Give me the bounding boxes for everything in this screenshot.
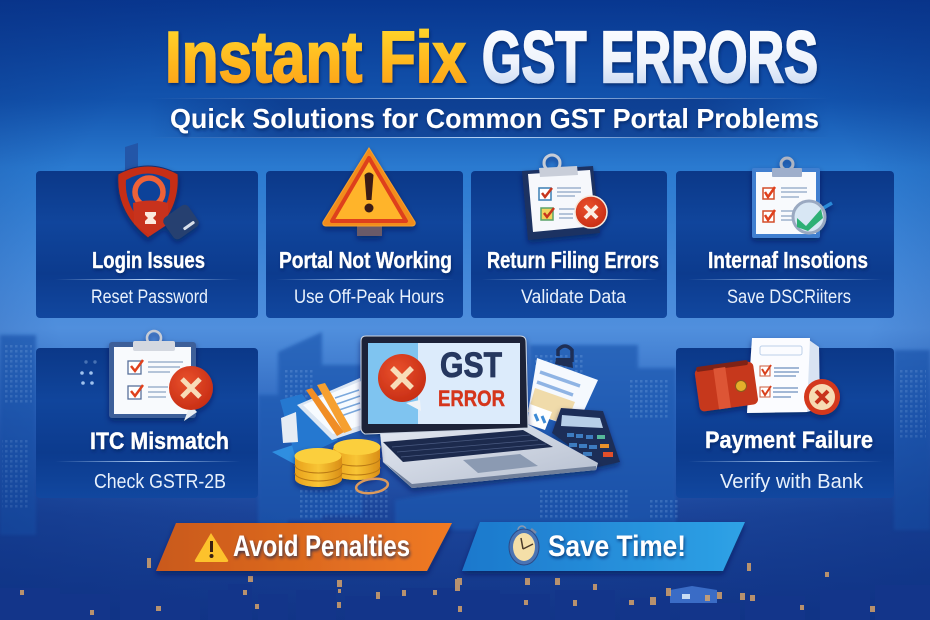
bottom night skyline (0, 558, 930, 620)
banner text: Save Time! (548, 530, 686, 563)
panel: payment failure (676, 348, 894, 498)
dots (80, 360, 97, 385)
decorative dark block behind login icon (125, 143, 138, 172)
icon: clipboard with red x (itc) (109, 331, 213, 421)
lit house (670, 586, 717, 603)
heading: itc mismatch: ITC Mismatch (90, 428, 229, 455)
heading: internaf insotions: Internaf Insotions (708, 247, 868, 273)
touchpad (463, 454, 538, 473)
skyline windows (2, 345, 926, 520)
illustration: calculator (552, 408, 620, 467)
banner: avoid penalties (156, 523, 452, 571)
banner: save time (462, 522, 745, 571)
illustration: paper and clip (527, 346, 598, 430)
keyboard (383, 430, 553, 462)
icon: clipboard with magnifier (752, 158, 832, 238)
screen bezel (361, 336, 528, 434)
banner text: Avoid Penalties (233, 530, 410, 563)
solution: off-peak hours: Use Off-Peak Hours (294, 287, 444, 308)
heading: login issues: Login Issues (92, 247, 205, 273)
error bubble (406, 400, 421, 411)
heading: return filing errors: Return Filing Errors (487, 247, 659, 273)
illustration: rubber band (355, 477, 389, 495)
panel: internal insotions (676, 171, 894, 318)
icon: shield lock (118, 166, 201, 241)
laptop base (380, 424, 598, 488)
illustration: coin stacks (294, 439, 380, 487)
title (165, 18, 818, 98)
solution: verify with bank: Verify with Bank (720, 471, 864, 493)
subtitle: Quick Solutions for Common GST Portal Problems (170, 103, 819, 134)
icon: stopwatch (509, 526, 539, 565)
icon: warning triangle (323, 148, 415, 236)
screen text: GST: GST (440, 346, 502, 385)
panel: login issues (36, 171, 258, 318)
heading: portal not working: Portal Not Working (279, 247, 452, 273)
illustration: documents and pencils (272, 378, 362, 466)
solution: save dsc: Save DSCRiiters (727, 287, 851, 308)
icon: clipboard with red x (return filing) (522, 155, 607, 240)
panel: return filing errors (471, 171, 667, 318)
illustration: laptop (361, 336, 598, 488)
panel: itc mismatch (36, 348, 258, 498)
icon: wallet and document with x (694, 338, 840, 415)
solution: check gstr-2b: Check GSTR-2B (94, 471, 226, 493)
screen text: ERROR: ERROR (438, 386, 505, 411)
icon: warning (195, 533, 228, 562)
solution: validate data: Validate Data (521, 287, 626, 308)
solution: reset password: Reset Password (91, 287, 208, 308)
heading: payment failure: Payment Failure (705, 427, 873, 454)
subtitle band (150, 98, 830, 138)
title: Instant Fix: Instant Fix (165, 18, 466, 98)
mid city skyline (0, 332, 930, 535)
panel: portal not working (266, 171, 463, 318)
